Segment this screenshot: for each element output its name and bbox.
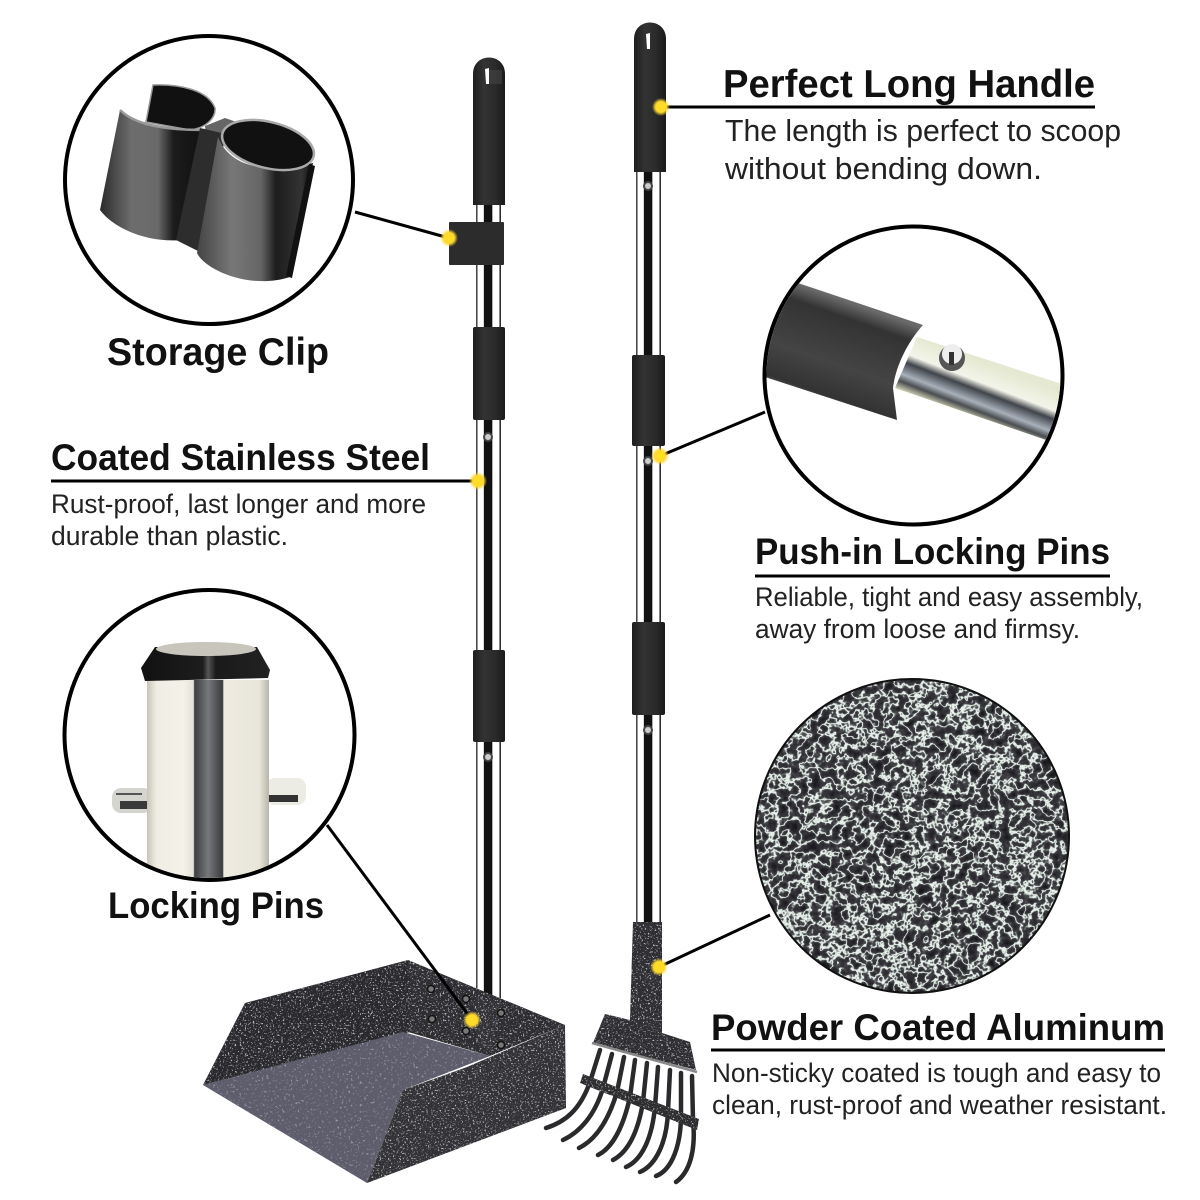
rubber end cap: [141, 642, 270, 681]
steel shaft: [636, 165, 661, 930]
rake neck and mount: [593, 922, 696, 1070]
steel tube close-up: [895, 337, 1065, 442]
text: powder coated aluminum description: [712, 1058, 1167, 1120]
grip joint lower: [473, 650, 505, 742]
text: perfect long handle description: The length is perfect to scoop: [725, 113, 1121, 148]
heading: storage clip: Storage Clip: [107, 331, 329, 374]
metal pin right: [266, 778, 306, 805]
panel: powder coated texture magnifier: [755, 679, 1069, 993]
dustpan floor: [203, 1032, 490, 1183]
steel shaft: [476, 200, 501, 1025]
text: perfect long handle description: [724, 113, 1121, 186]
heading: perfect long handle: Perfect Long Handle: [723, 63, 1095, 106]
rake crossbar: [580, 1074, 699, 1130]
heading: coated stainless steel: Coated Stainless Steel: [51, 437, 430, 478]
text: powder coated aluminum description: clean, rust-proof and weather resistant.: [712, 1090, 1167, 1120]
dustpan: [203, 960, 566, 1183]
pins on shaft: [484, 433, 492, 761]
rake head: [546, 922, 699, 1182]
text: push-in locking pins description: [755, 582, 1143, 644]
text: coated stainless steel description: Rust-proof, last longer and more: [51, 489, 426, 519]
panel: push-in locking pins magnifier: [762, 226, 1065, 524]
rake bar: [592, 1043, 697, 1072]
connector lines: [51, 107, 1165, 1050]
panel: locking pins magnifier: [64, 590, 354, 890]
heading: push-in locking pins: Push-in Locking Pins: [755, 531, 1110, 572]
text: coated stainless steel description: durable than plastic.: [51, 521, 288, 551]
metal pin left: [112, 788, 147, 813]
text: coated stainless steel description: [51, 489, 426, 551]
black grip close-up: [762, 283, 923, 420]
steel tube: [147, 680, 269, 890]
left pole with dustpan handle: [449, 58, 505, 1025]
rake tines: [546, 1050, 694, 1182]
grip joint lower: [632, 622, 665, 715]
hotspot dots: [440, 98, 670, 1029]
text: push-in locking pins description: away from loose and firmsy.: [755, 614, 1080, 644]
text: perfect long handle description: without bending down.: [724, 151, 1042, 186]
dustpan back-right wall: [408, 960, 565, 1056]
dustpan socket: [476, 1000, 502, 1053]
handle grip: [473, 58, 505, 205]
heading: locking pins: Locking Pins: [108, 885, 324, 926]
right pole with rake handle: [632, 22, 666, 930]
clip icon: storage clip close-up: [100, 85, 319, 281]
locking pin close-up: [939, 344, 965, 371]
heading: powder coated aluminum: Powder Coated Aluminum: [711, 1007, 1165, 1048]
text: powder coated aluminum description: Non-sticky coated is tough and easy to: [712, 1058, 1161, 1088]
handle grip: [634, 22, 666, 172]
storage clip on pole: [449, 222, 504, 265]
text: push-in locking pins description: Reliable, tight and easy assembly,: [755, 582, 1143, 612]
dustpan right wall: [367, 1025, 566, 1183]
dustpan back-left wall: [203, 960, 410, 1085]
grip joint upper: [473, 327, 505, 420]
grip joint upper: [632, 355, 665, 446]
dustpan screws: [428, 986, 504, 1048]
pins on shaft: [644, 182, 652, 734]
panel: storage clip magnifier: [65, 36, 353, 324]
